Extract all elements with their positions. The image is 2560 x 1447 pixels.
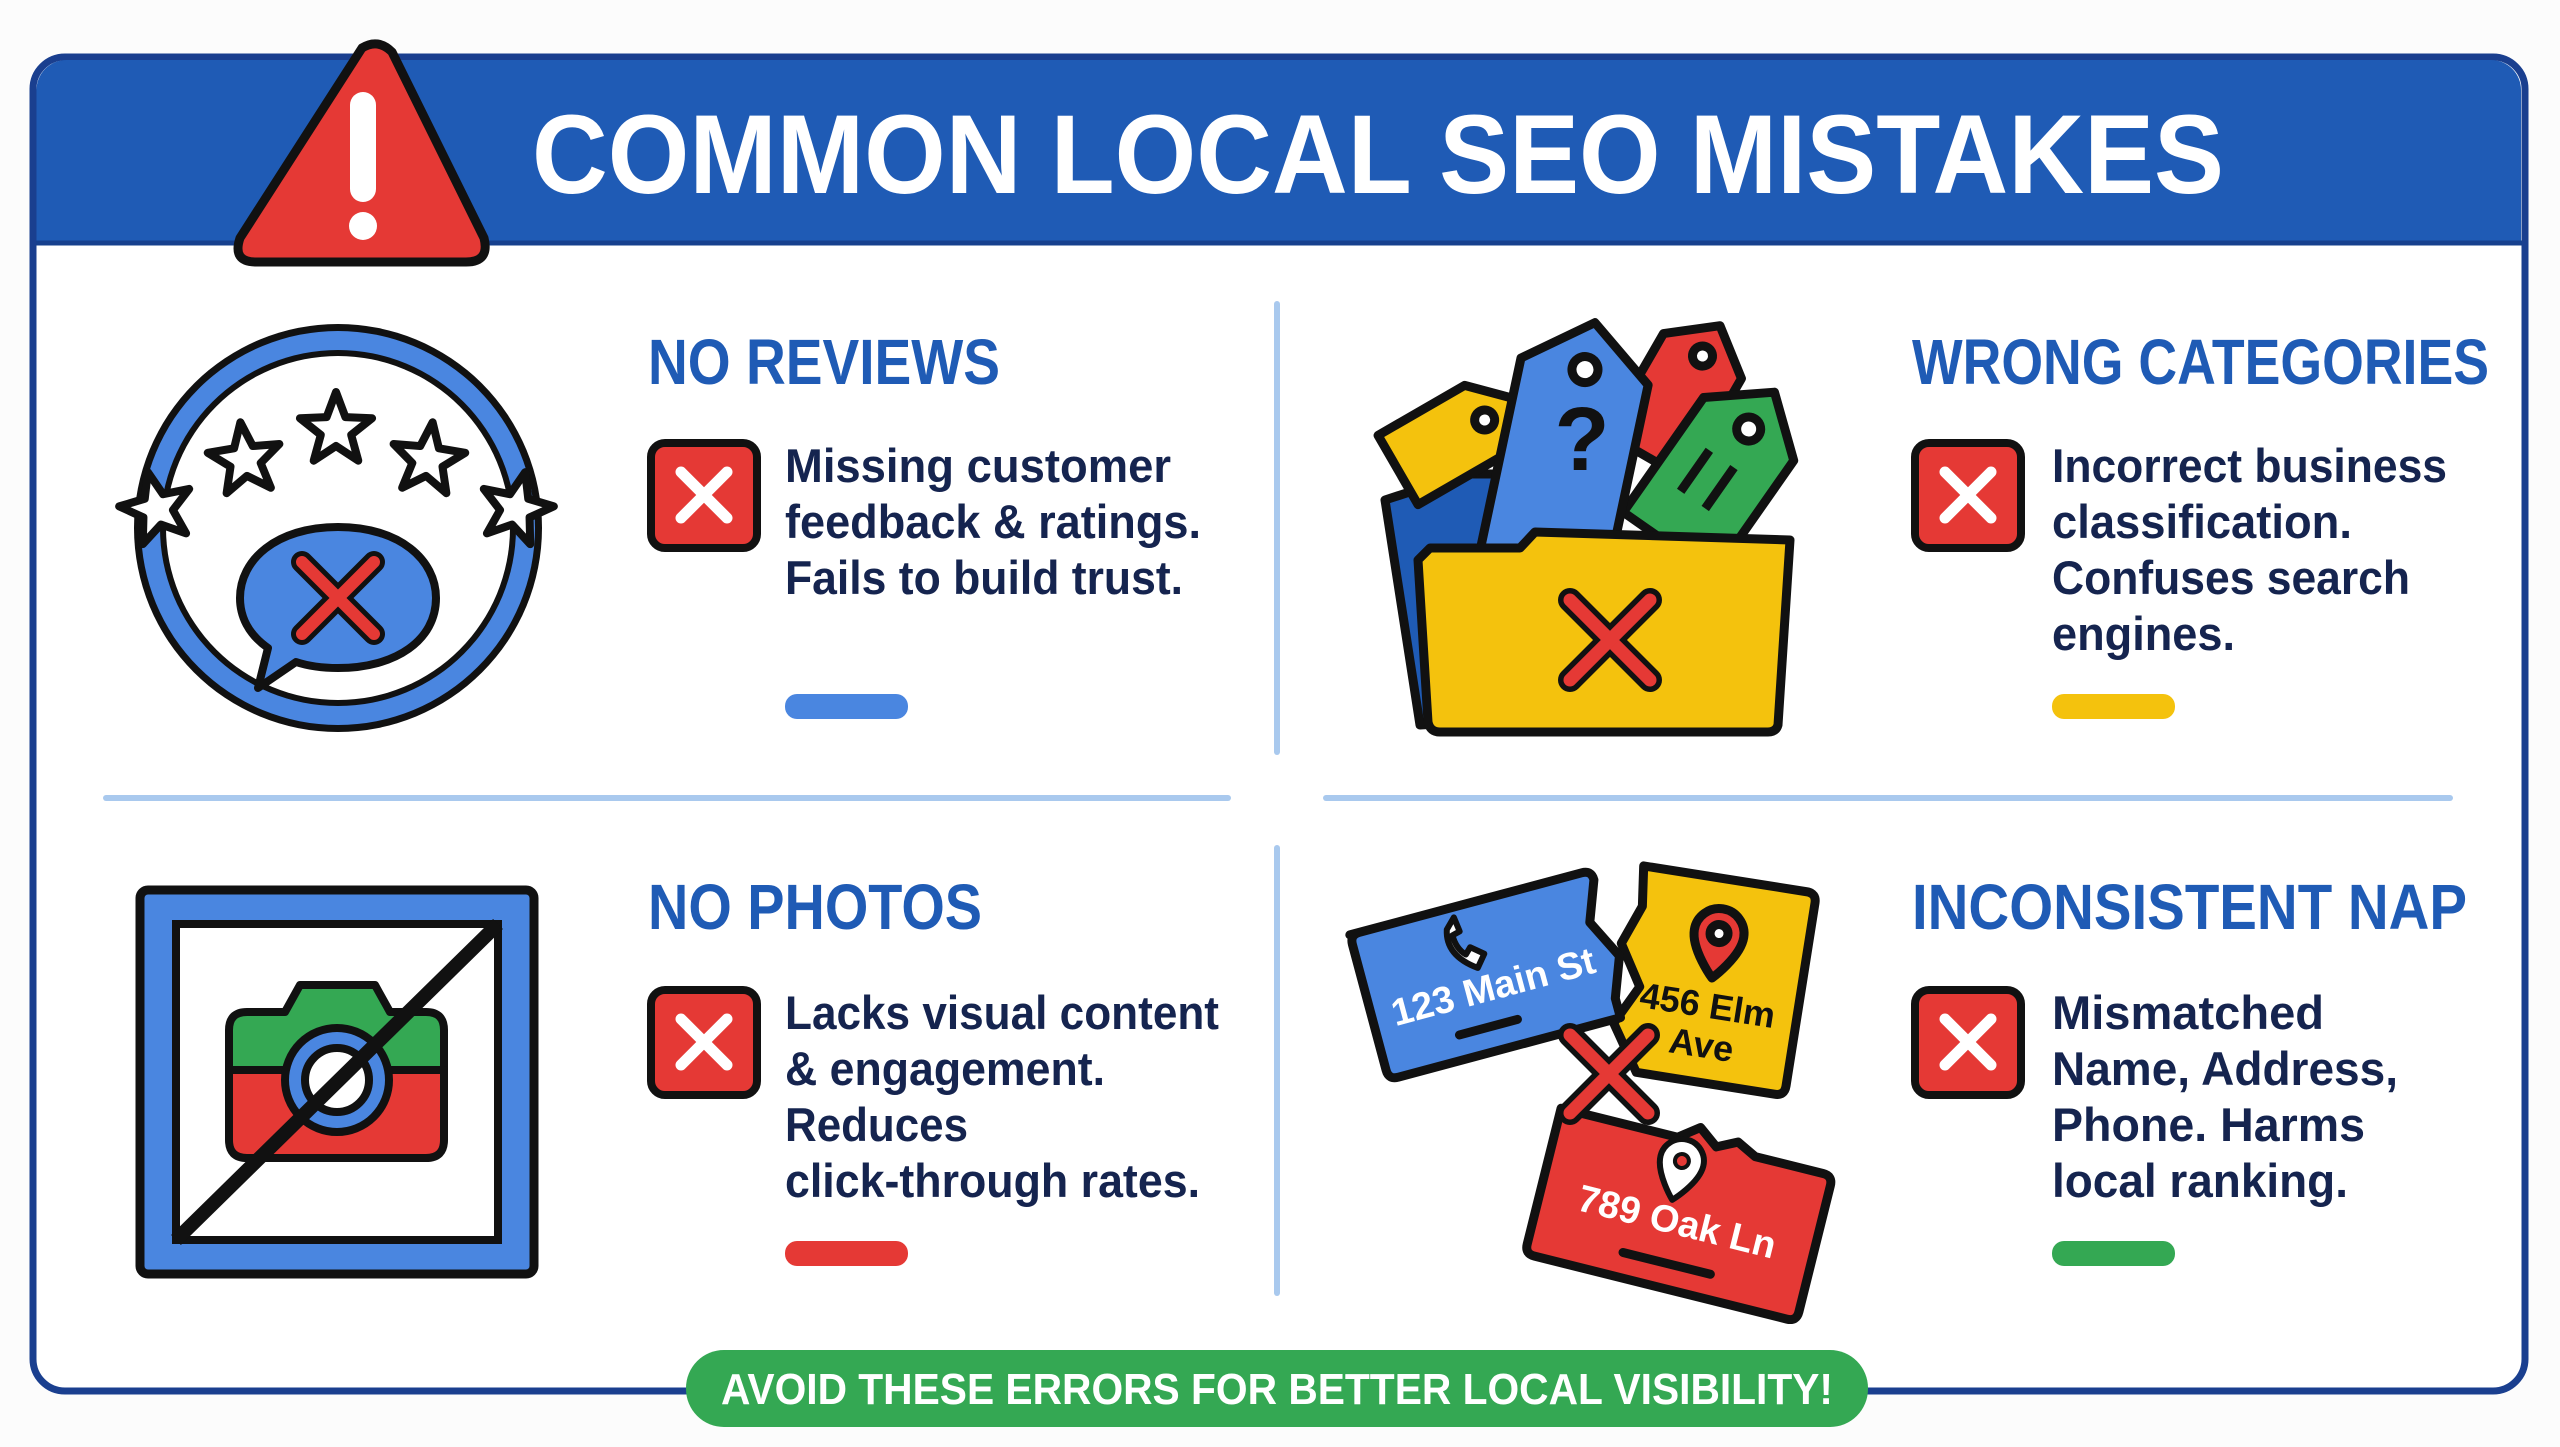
panel: no photos (140, 871, 1219, 1274)
text: nap description: Name, Address, (2052, 1042, 2398, 1095)
accent bar blue (785, 694, 908, 719)
text: categories description: engines. (2052, 607, 2235, 660)
footer callout pill (686, 1350, 1868, 1427)
icon: mismatched address cards: 123 Main St (1387, 940, 1600, 1035)
text: photos description (785, 986, 1219, 1207)
icon: red x box (651, 990, 757, 1095)
heading: no photos: NO PHOTOS (648, 871, 982, 943)
footer callout pill: AVOID THESE ERRORS FOR BETTER LOCAL VISIBILITY! (721, 1365, 1833, 1414)
icon: mismatched address cards: 456 Elm (1637, 974, 1778, 1036)
text: photos description: Reduces (785, 1098, 968, 1151)
icon: mismatched address cards: Ave (1666, 1019, 1737, 1070)
accent bar green (2052, 1241, 2175, 1266)
text: categories description: classification. (2052, 495, 2352, 548)
text: nap description: Mismatched (2052, 986, 2324, 1039)
icon: red x box (1915, 443, 2021, 548)
panel: no reviews (113, 324, 1201, 732)
text: categories description: Confuses search (2052, 551, 2410, 604)
dividers (106, 304, 2450, 1293)
icon: red x box (1915, 990, 2021, 1095)
icon: warning triangle (238, 44, 485, 262)
accent bar yellow (2052, 694, 2175, 719)
text: categories description: Incorrect business (2052, 439, 2447, 492)
text: reviews description: Fails to build trust. (785, 551, 1183, 604)
text: photos description: click-through rates. (785, 1154, 1200, 1207)
heading: no reviews: NO REVIEWS (648, 326, 1000, 398)
title: COMMON LOCAL SEO MISTAKES (532, 92, 2224, 217)
text: photos description: Lacks visual content (785, 986, 1219, 1039)
icon: mismatched address cards (1350, 864, 1836, 1321)
text: photos description: & engagement. (785, 1042, 1105, 1095)
icon: mismatched address cards: 789 Oak Ln (1573, 1178, 1780, 1268)
text: nap description: local ranking. (2052, 1154, 2348, 1207)
icon: folder with tags: ? (1555, 390, 1609, 490)
icon: folder with tags (1378, 303, 1820, 732)
icon: crossed-out camera frame (140, 890, 534, 1274)
accent bar red (785, 1241, 908, 1266)
heading: inconsistent nap: INCONSISTENT NAP (1912, 871, 2467, 943)
text: reviews description (785, 439, 1201, 604)
text: nap description: Phone. Harms (2052, 1098, 2365, 1151)
panel: inconsistent nap (1350, 864, 2467, 1321)
text: reviews description: Missing customer (785, 439, 1171, 492)
panel: wrong categories (1378, 303, 2489, 732)
text: categories description (2052, 439, 2447, 660)
icon: stars and speech bubble (113, 324, 560, 732)
icon: red x box (651, 443, 757, 548)
text: nap description (2052, 986, 2398, 1207)
text: reviews description: feedback & ratings. (785, 495, 1201, 548)
